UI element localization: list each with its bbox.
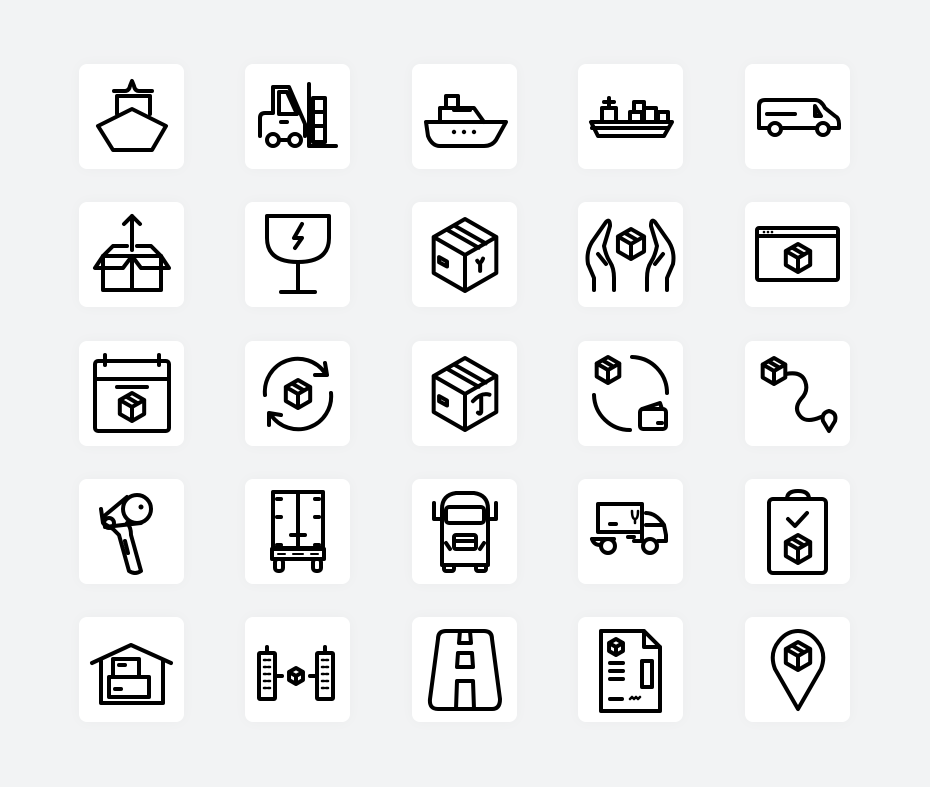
icon tile: ship front (79, 64, 184, 169)
icon tile: box keep dry (412, 341, 517, 446)
icon tile: tape dispenser (79, 479, 184, 584)
icon tile: box to wallet exchange (578, 341, 683, 446)
icon tile: truck rear (245, 479, 350, 584)
icon tile: warehouse (79, 617, 184, 722)
icon tile: clipboard with check and box (745, 479, 850, 584)
icon tile: open box with up arrow (79, 202, 184, 307)
icon tile: delivery truck side (578, 479, 683, 584)
icon tile: forklift (245, 64, 350, 169)
icon tile: location pin with box (745, 617, 850, 722)
icon tile: van (745, 64, 850, 169)
icon tile: road (412, 617, 517, 722)
icon tile: box route to pin (745, 341, 850, 446)
icon tile: truck front (412, 479, 517, 584)
icon tile: calendar with box (79, 341, 184, 446)
icon tile: fragile glass (245, 202, 350, 307)
icon tile: fragile box (412, 202, 517, 307)
icon tile: document with box (578, 617, 683, 722)
icon tile: cargo ship (578, 64, 683, 169)
icon tile: hands holding box (578, 202, 683, 307)
icon tile: refresh with box (245, 341, 350, 446)
icon tile: browser with box (745, 202, 850, 307)
icon tile: buildings with box (245, 617, 350, 722)
icon tile: yacht (412, 64, 517, 169)
